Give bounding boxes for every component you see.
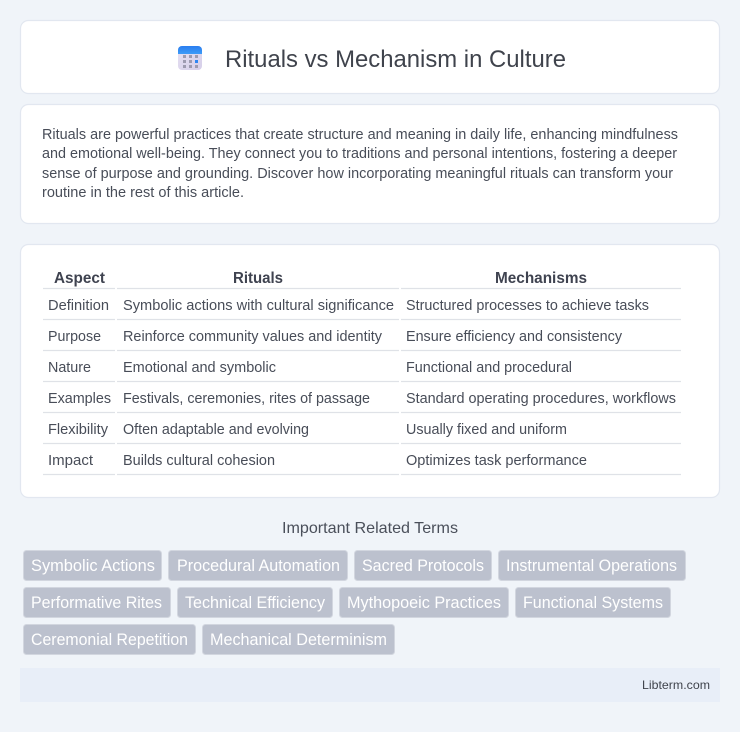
panel: introduction [20,104,720,224]
table row: examples: Examples [48,391,111,407]
tag: Procedural Automation: Procedural Automation [177,557,340,575]
footer [20,668,720,702]
table row: impact: Optimizes task performance [406,453,587,469]
text block: introduction: sense of purpose and grounding. Discover how incorporating meaningful rituals can transform your [42,166,673,182]
tag: Procedural Automation [168,550,348,580]
table row: purpose: Reinforce community values and identity [123,329,383,345]
tag: Instrumental Operations: Instrumental Operations [506,557,677,575]
text block: introduction [42,127,678,201]
tag: Sacred Protocols: Sacred Protocols [362,557,484,575]
panel: header [20,20,720,94]
text block: introduction: and emotional well-being. They connect you to traditions and personal intentions, fostering a deeper [42,146,677,162]
table row: flexibility: Flexibility [48,422,109,438]
tag: Instrumental Operations [498,550,686,580]
table row: definition: Structured processes to achieve tasks [406,298,649,314]
tag: Symbolic Actions: Symbolic Actions [31,557,155,575]
tag: Mechanical Determinism: Mechanical Determinism [210,631,387,649]
title: Rituals vs Mechanism in Culture [225,46,566,73]
tag: Performative Rites [24,588,170,618]
text block: introduction: routine in the rest of this article. [42,185,244,201]
tag: Symbolic Actions [24,550,162,580]
table row: flexibility: Often adaptable and evolving [123,422,309,438]
table row: definition [48,298,649,314]
footer: Libterm.com [642,678,710,692]
tag: Ceremonial Repetition [24,624,196,654]
tag: Sacred Protocols [354,550,492,580]
table row: purpose: Ensure efficiency and consistency [406,329,623,345]
panel: comparison table [20,244,720,498]
heading: related terms: Important Related Terms [282,520,458,537]
table row: nature: Functional and procedural [406,360,572,376]
table row: purpose [48,329,623,345]
tag: Mechanical Determinism [202,624,394,654]
table row: nature: Nature [48,360,91,376]
tag: Technical Efficiency: Technical Efficiency [185,594,326,612]
table header: Mechanisms [495,270,587,287]
text block: introduction: Rituals are powerful practices that create structure and meaning in daily life, enhancing mindfulness [42,127,678,143]
tag: Mythopoeic Practices: Mythopoeic Practices [347,594,501,612]
table row: examples: Standard operating procedures, workflows [406,391,676,407]
table row: flexibility: Usually fixed and uniform [406,422,567,438]
tag: Technical Efficiency [178,588,332,618]
tag: Mythopoeic Practices [340,588,508,618]
tag: Ceremonial Repetition: Ceremonial Repetition [31,631,188,649]
table row: examples [48,391,676,407]
icon: calendar [178,46,202,70]
table header [54,270,587,287]
table row: impact [48,453,587,469]
table row: definition: Symbolic actions with cultural significance [123,298,394,314]
table row: impact: Builds cultural cohesion [123,453,275,469]
table row: impact: Impact [48,453,93,469]
table header: Aspect [54,270,106,287]
tag: Functional Systems: Functional Systems [523,594,663,612]
table header: Rituals [233,270,283,287]
table row: nature: Emotional and symbolic [123,360,276,376]
table row: definition: Definition [48,298,109,314]
table row: purpose: Purpose [48,329,101,345]
table row: nature [48,360,572,376]
table row: flexibility [48,422,567,438]
tag: Functional Systems [516,588,670,618]
table row: examples: Festivals, ceremonies, rites of passage [123,391,370,407]
tag: Performative Rites: Performative Rites [31,594,162,612]
